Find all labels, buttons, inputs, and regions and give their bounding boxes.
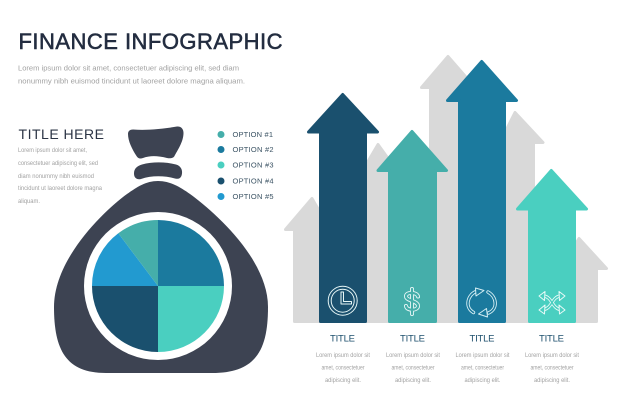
column 2 label: TITLE xyxy=(400,334,426,344)
column 4 label: Lorem ipsum dolor sit xyxy=(525,352,579,359)
icon: money bag xyxy=(54,126,268,373)
bar chart: gray background arrows xyxy=(286,56,606,322)
column 2 label: Lorem ipsum dolor sit xyxy=(386,352,440,359)
pie chart xyxy=(92,220,224,352)
icon: clock xyxy=(328,286,357,315)
legend: OPTION #5 xyxy=(232,192,274,201)
column 4 label xyxy=(525,334,579,384)
arrow 1: dark blue xyxy=(308,94,378,322)
text block: title here description: diam nonummy nibh euismod xyxy=(18,173,95,180)
arrow 3: blue xyxy=(448,62,516,322)
icon: cycle arrows xyxy=(468,288,495,317)
column 2 label: amet, consectetuer xyxy=(392,364,434,372)
column 3 label: adipiscing elit. xyxy=(464,377,501,384)
column 1 label: amet, consectetuer xyxy=(322,364,364,372)
legend: OPTION #3 xyxy=(232,161,274,170)
column 3 label xyxy=(456,334,510,384)
column 2 label xyxy=(386,334,440,384)
arrow 2: teal xyxy=(378,132,446,322)
intro text: nonummy nibh euismod tincidunt ut laoreet dolore magna aliquam. xyxy=(18,76,245,86)
column 4 label: amet, consectetuer xyxy=(530,364,574,372)
text block: title here description: consectetuer adipiscing elit, sed xyxy=(18,160,98,167)
icon: shuffle arrows xyxy=(539,292,565,314)
arrow 4: mint xyxy=(518,170,586,322)
text block: title here description xyxy=(18,147,103,205)
text block: title here description: aliquam. xyxy=(18,198,40,205)
legend xyxy=(218,130,274,201)
column 3 label: amet, consectetuer xyxy=(461,364,504,372)
legend: OPTION #2 xyxy=(232,145,274,154)
column 4 label: adipiscing elit. xyxy=(534,377,570,384)
column 3 label: Lorem ipsum dolor sit xyxy=(456,352,510,359)
intro text: Lorem ipsum dolor sit amet, consectetuer adipiscing elit, sed diam xyxy=(18,64,239,72)
legend: OPTION #4 xyxy=(232,177,274,186)
heading: title here: TITLE HERE xyxy=(18,126,104,142)
column 1 label: adipiscing elit. xyxy=(325,377,361,384)
column 1 label: TITLE xyxy=(330,334,356,344)
text block: title here description: Lorem ipsum dolor sit amet, xyxy=(18,147,87,154)
column 4 label: TITLE xyxy=(539,334,565,344)
column 1 label: Lorem ipsum dolor sit xyxy=(316,352,370,359)
intro text xyxy=(18,64,245,86)
icon: dollar xyxy=(406,289,418,314)
title: FINANCE INFOGRAPHIC xyxy=(18,29,283,54)
text block: title here description: tincidunt ut laoreet dolore magna xyxy=(18,185,103,192)
column 2 label: adipiscing elit. xyxy=(395,377,431,384)
legend: OPTION #1 xyxy=(232,130,273,139)
column 1 label xyxy=(316,334,370,384)
column 3 label: TITLE xyxy=(470,334,496,344)
